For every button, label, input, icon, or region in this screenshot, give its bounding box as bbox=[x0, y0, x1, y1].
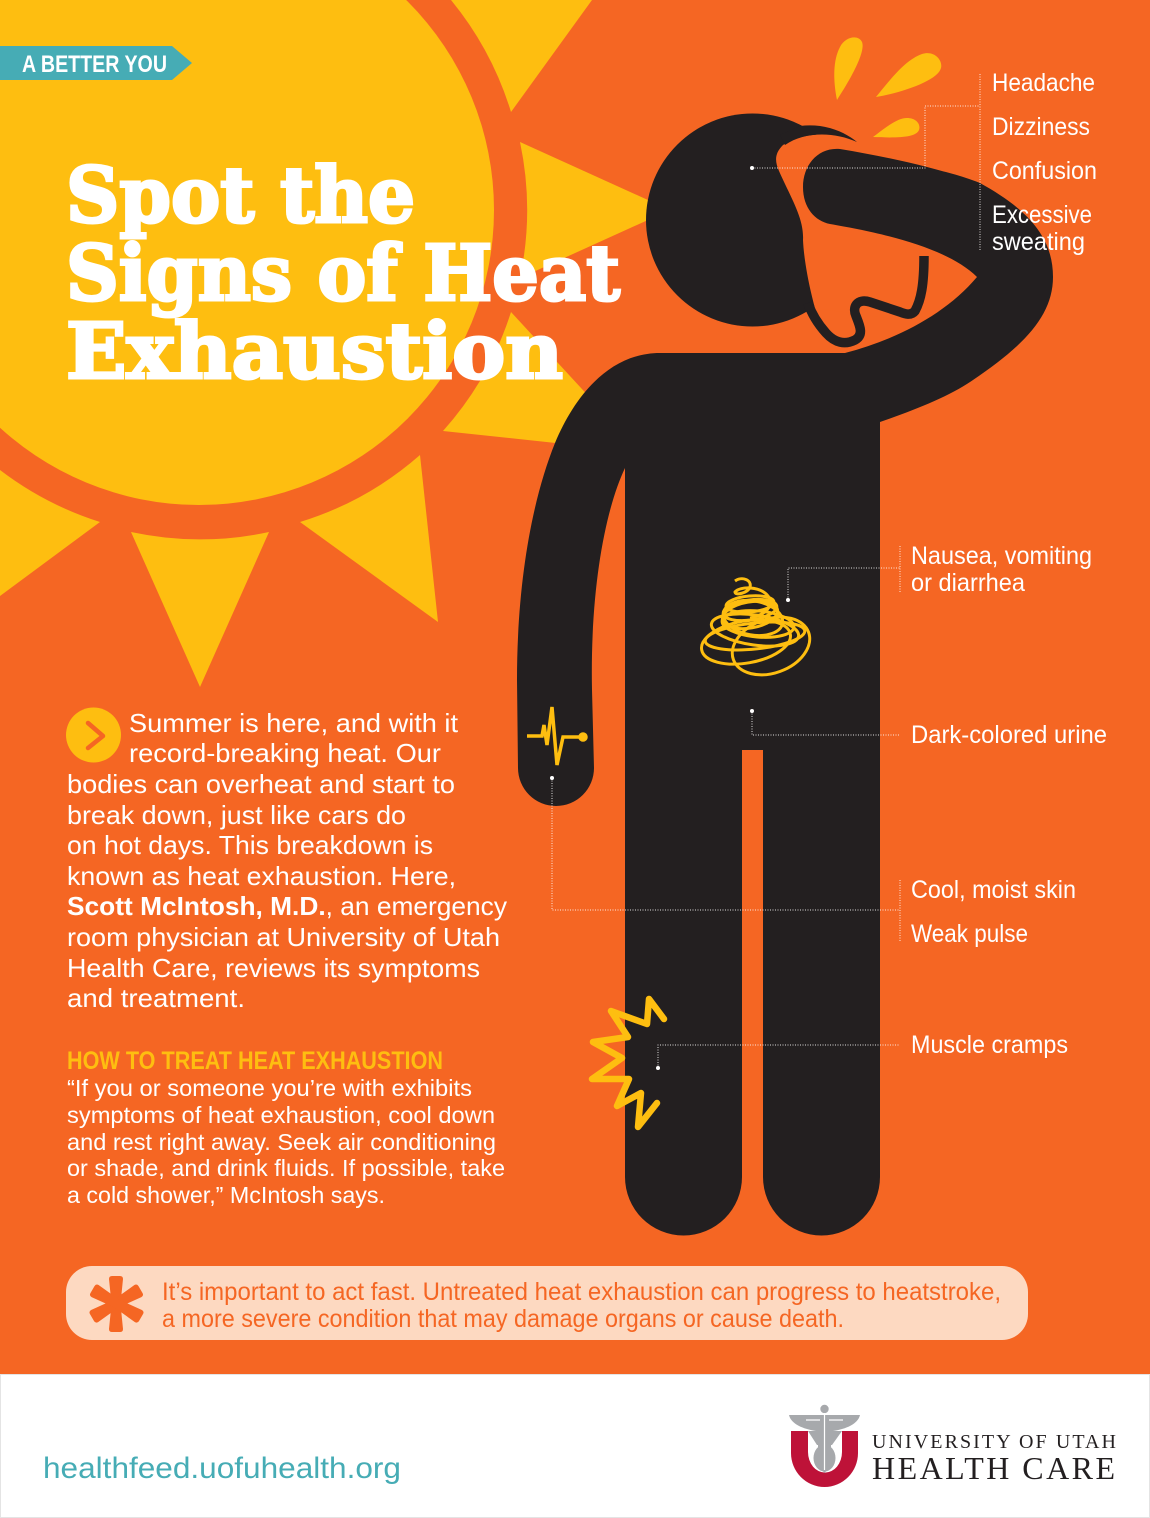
face cutout bbox=[776, 134, 900, 320]
symptom labels: head: Excessive bbox=[992, 201, 1092, 229]
icon: pulse bbox=[527, 707, 586, 765]
tag: A Better You bbox=[0, 46, 192, 80]
treatment text: or shade, and drink fluids. If possible, take bbox=[67, 1155, 505, 1181]
tag: A Better You: A BETTER YOU bbox=[22, 51, 167, 78]
intro text bbox=[67, 708, 507, 1013]
icon: sun bbox=[0, 0, 670, 687]
intro text: room physician at University of Utah bbox=[67, 922, 500, 952]
treatment text: “If you or someone you’re with exhibits bbox=[67, 1075, 472, 1101]
footer url: healthfeed.uofuhealth.org bbox=[43, 1452, 401, 1485]
icon: stomach scribble bbox=[698, 579, 818, 685]
callout: act fast bbox=[66, 1266, 1028, 1340]
intro text: on hot days. This breakdown is bbox=[67, 830, 433, 860]
face line bbox=[808, 256, 924, 343]
title: Spot the bbox=[66, 151, 415, 241]
symptom labels: head: Confusion bbox=[992, 157, 1097, 185]
intro text: Scott McIntosh, M.D., an emergency bbox=[67, 891, 507, 921]
icon: chevron circle bbox=[66, 708, 121, 762]
figure: person holding head bbox=[517, 114, 1053, 1236]
symptom label: cramps: Muscle cramps bbox=[911, 1031, 1068, 1059]
symptom labels: skin and pulse: Cool, moist skin bbox=[911, 876, 1076, 904]
intro text: bodies can overheat and start to bbox=[67, 769, 455, 799]
icon: sweat drops bbox=[834, 37, 941, 137]
icon: asterisk bbox=[89, 1276, 144, 1332]
treatment text: and rest right away. Seek air conditioning bbox=[67, 1129, 496, 1155]
symptom labels: head: Dizziness bbox=[992, 113, 1090, 141]
callout: act fast: It’s important to act fast. Untreated heat exhaustion can progress to heatstroke, bbox=[162, 1278, 1001, 1306]
symptom labels: head: Headache bbox=[992, 69, 1095, 97]
intro text: break down, just like cars do bbox=[67, 800, 406, 830]
symptom labels: skin and pulse bbox=[911, 876, 1076, 948]
intro text: Health Care, reviews its symptoms bbox=[67, 953, 480, 983]
treatment text bbox=[67, 1075, 505, 1208]
logo: University of Utah Health Care: UNIVERSITY OF UTAH bbox=[872, 1431, 1116, 1453]
body and raised arm bbox=[517, 149, 1053, 1236]
title: Signs of Heat bbox=[66, 229, 620, 319]
logo: University of Utah Health Care: HEALTH CARE bbox=[872, 1450, 1115, 1486]
head bbox=[646, 114, 859, 326]
intro text: and treatment. bbox=[67, 983, 245, 1013]
symptom label: stomach: Nausea, vomiting bbox=[911, 542, 1092, 570]
symptom label: stomach bbox=[911, 542, 1092, 597]
intro text: Summer is here, and with it bbox=[129, 708, 459, 738]
intro text: known as heat exhaustion. Here, bbox=[67, 861, 456, 891]
logo mark bbox=[789, 1405, 860, 1487]
callout: act fast: a more severe condition that may damage organs or cause death. bbox=[162, 1305, 844, 1333]
symptom labels: skin and pulse: Weak pulse bbox=[911, 920, 1028, 948]
symptom labels: head bbox=[992, 69, 1097, 256]
symptom labels: head: sweating bbox=[992, 228, 1085, 256]
treatment text: a cold shower,” McIntosh says. bbox=[67, 1182, 385, 1208]
title bbox=[66, 151, 620, 397]
hair tip bbox=[780, 125, 857, 145]
treatment heading: HOW TO TREAT HEAT EXHAUSTION bbox=[67, 1047, 443, 1075]
logo: University of Utah Health Care bbox=[789, 1405, 1116, 1487]
title: Exhaustion bbox=[66, 307, 563, 397]
symptom label: stomach: or diarrhea bbox=[911, 569, 1025, 597]
intro text: record-breaking heat. Our bbox=[129, 738, 441, 768]
symptom label: urine: Dark-colored urine bbox=[911, 721, 1107, 749]
footer band bbox=[0, 1374, 1150, 1518]
leader lines bbox=[550, 74, 980, 1070]
treatment text: symptoms of heat exhaustion, cool down bbox=[67, 1102, 495, 1128]
icon: cramp zigzag bbox=[592, 999, 664, 1127]
